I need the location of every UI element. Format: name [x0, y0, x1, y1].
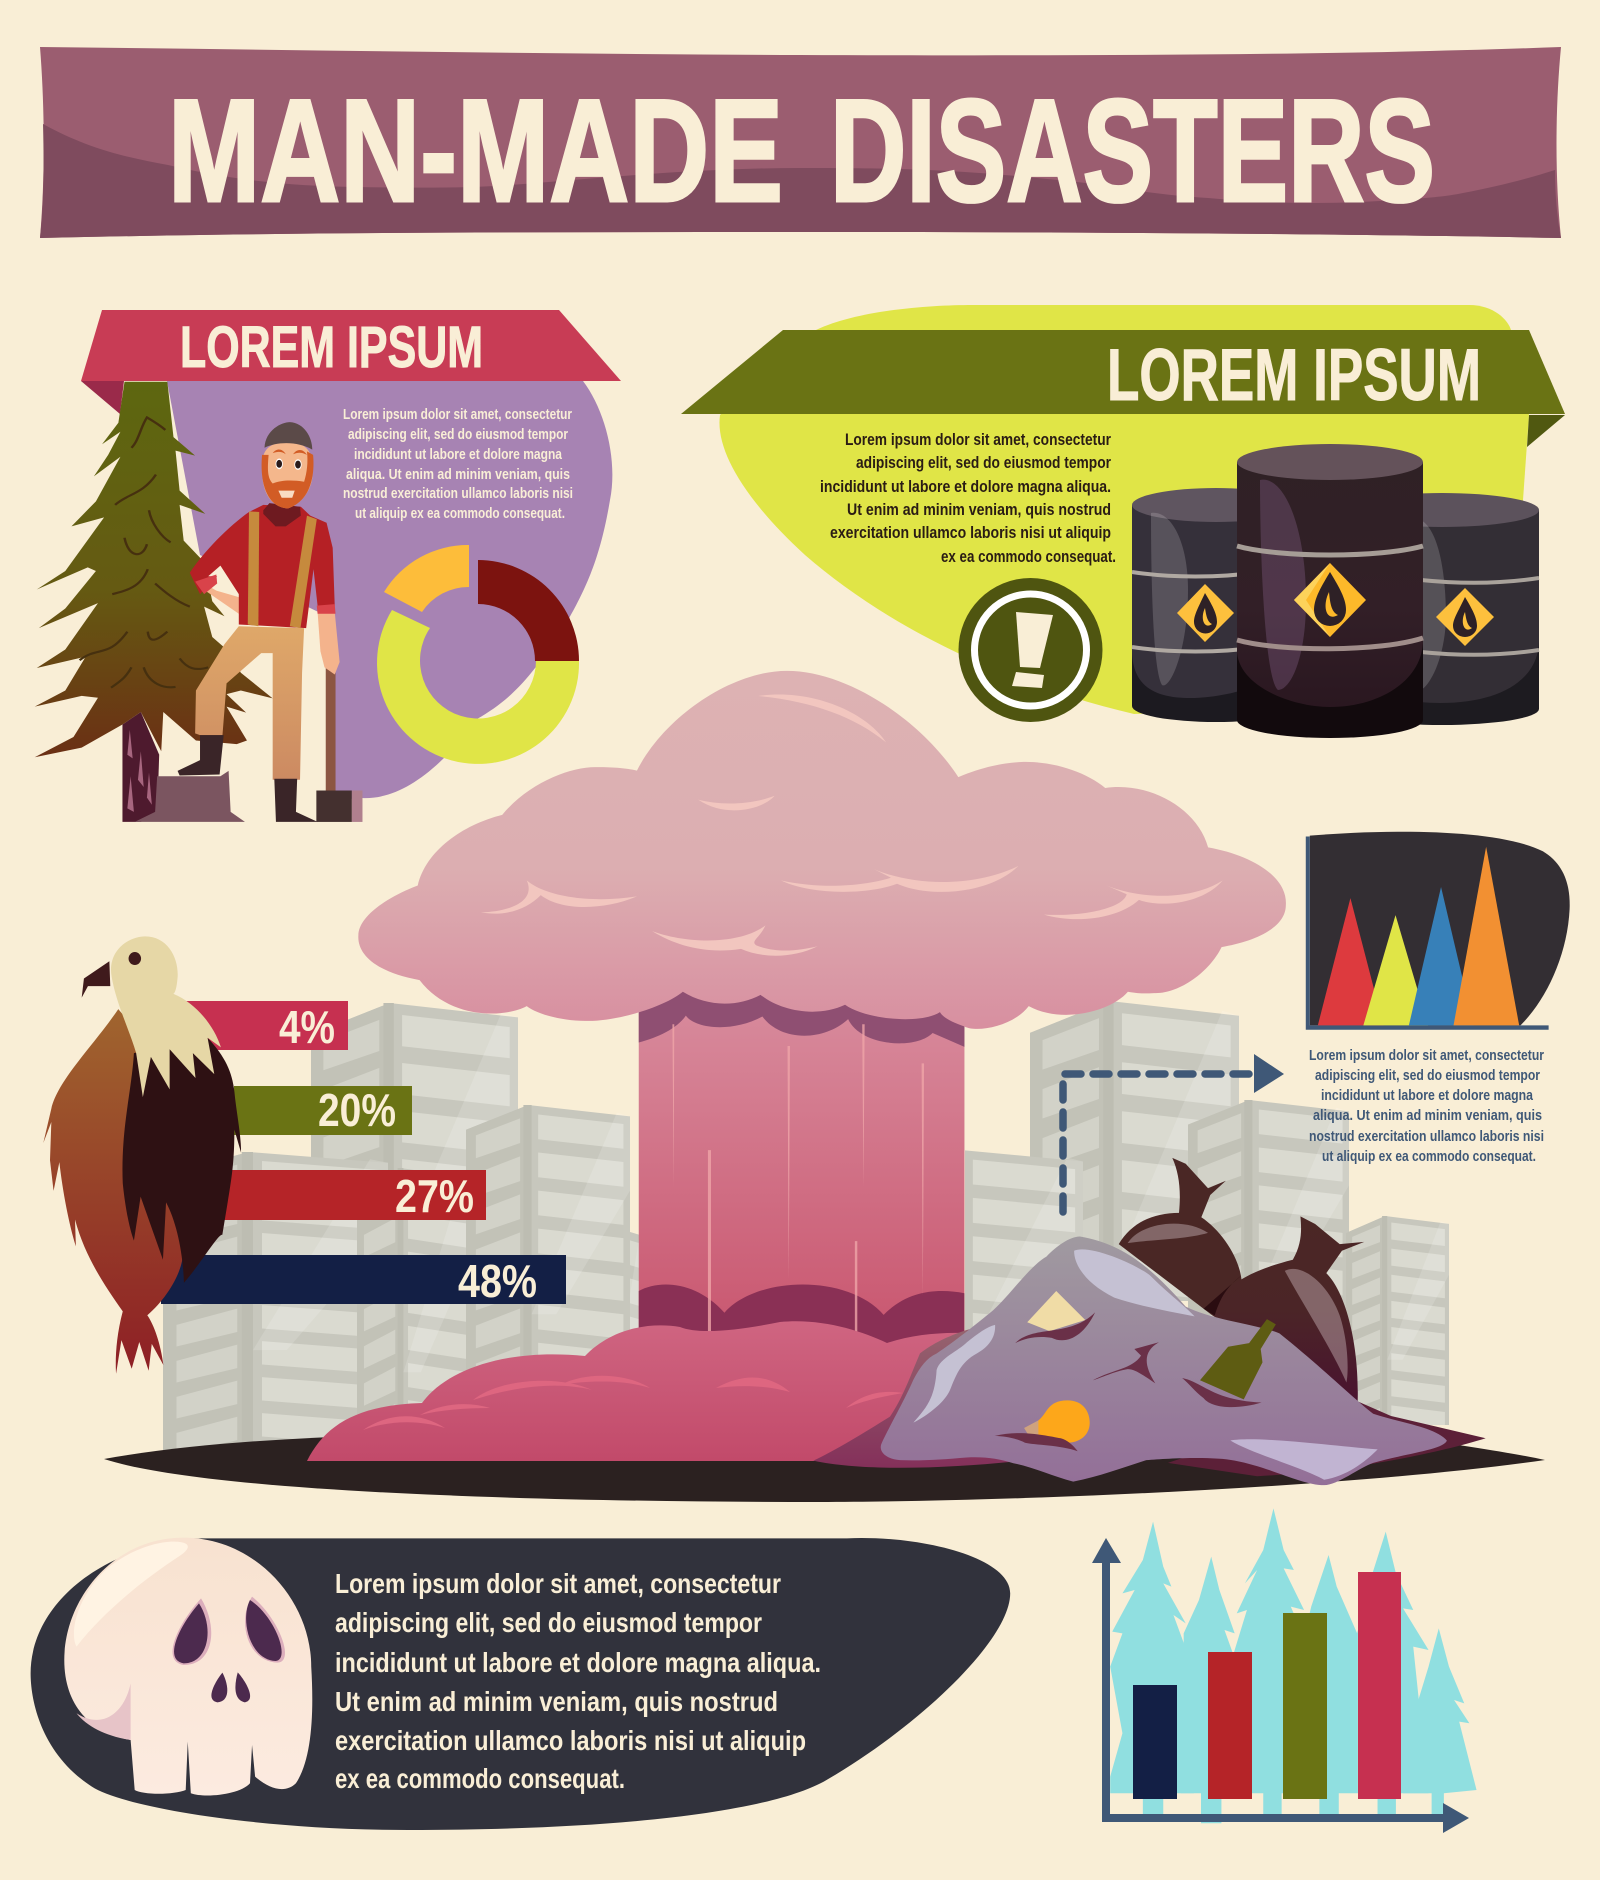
- purple blob: [167, 381, 612, 800]
- body text: adipiscing elit, sed do eiusmod tempor: [856, 453, 1111, 472]
- forest silhouette: [1110, 1508, 1477, 1823]
- donut chart: [377, 545, 579, 764]
- body text: Lorem ipsum dolor sit amet, consectetur: [343, 407, 572, 423]
- red banner: [81, 310, 621, 414]
- body text: ut aliquip ex ea commodo consequat.: [355, 506, 565, 522]
- body text: Lorem ipsum dolor sit amet, consectetur: [335, 1568, 781, 1599]
- title banner: [40, 47, 1561, 238]
- mushroom cloud: [307, 671, 1286, 1461]
- bar 27%: 27%: [395, 1170, 474, 1222]
- light bulb: [1024, 1400, 1090, 1443]
- panel: skull text: [31, 1538, 1010, 1830]
- icon: skull: [64, 1538, 312, 1796]
- boots: [178, 735, 224, 776]
- pants: [195, 626, 304, 780]
- head: [262, 422, 314, 508]
- ground shadow: [104, 1424, 1545, 1502]
- pink ground cloud: [307, 1321, 1010, 1461]
- bar 20%: 20%: [318, 1084, 396, 1136]
- bar 48%: 48%: [458, 1255, 537, 1307]
- center barrel: [1237, 444, 1423, 738]
- trash heap: [881, 1236, 1447, 1485]
- chart caption: Lorem ipsum dolor sit amet, consectetur: [1309, 1048, 1544, 1064]
- building group left: [163, 1003, 645, 1606]
- body text: incididunt ut labore et dolore magna: [354, 447, 563, 463]
- garbage bags: [1119, 1158, 1364, 1405]
- body text: nostrud exercitation ullamco laboris nisi: [343, 486, 573, 502]
- bar 20%: [234, 1084, 412, 1136]
- green blob: [719, 305, 1529, 714]
- olive banner: [681, 330, 1565, 447]
- panel: triangle chart: [1306, 832, 1570, 1030]
- panel: forest bar chart: [1092, 1508, 1477, 1833]
- body text: adipiscing elit, sed do eiusmod tempor: [348, 427, 568, 443]
- rips in trash bag: [995, 1312, 1262, 1451]
- body text: incididunt ut labore et dolore magna aliqua.: [820, 477, 1111, 496]
- body text: Ut enim ad minim veniam, quis nostrud: [847, 500, 1111, 519]
- dark fold under trash: [813, 1327, 1013, 1468]
- bars: [1133, 1572, 1401, 1799]
- suspenders: [248, 511, 259, 626]
- dark blob: [1310, 832, 1570, 1025]
- bar 48%: [161, 1255, 566, 1307]
- left barrel: [1132, 488, 1300, 722]
- triangle bars: [1318, 847, 1519, 1025]
- icon: warning exclamation: [958, 578, 1102, 722]
- arrow: dashed connector: [1063, 1054, 1284, 1212]
- lumberjack figure: [135, 422, 362, 822]
- arms skin: [200, 583, 247, 614]
- trash pile: [813, 1158, 1486, 1485]
- body text: Lorem ipsum dolor sit amet, consectetur: [845, 430, 1111, 449]
- body text: exercitation ullamco laboris nisi ut aliquip: [335, 1725, 806, 1756]
- panel: lumberjack: [35, 310, 621, 822]
- building group right: [886, 1001, 1449, 1533]
- right barrel: [1345, 493, 1539, 725]
- bar 4%: [185, 1001, 348, 1053]
- pine tree: [35, 382, 273, 822]
- body text: adipiscing elit, sed do eiusmod tempor: [335, 1607, 762, 1638]
- body text: exercitation ullamco laboris nisi ut aliquip: [830, 523, 1111, 542]
- dark blob: [31, 1538, 1010, 1830]
- chart caption: adipiscing elit, sed do eiusmod tempor: [1315, 1068, 1540, 1084]
- body text: ex ea commodo consequat.: [941, 547, 1116, 566]
- axe: [316, 644, 362, 822]
- bar 27%: [214, 1170, 486, 1222]
- body text: [335, 1568, 821, 1794]
- title text: MAN-MADE: [168, 69, 783, 232]
- body text: Ut enim ad minim veniam, quis nostrud: [335, 1686, 778, 1717]
- chart axes: [1092, 1538, 1469, 1833]
- bar 4%: 4%: [279, 1001, 335, 1053]
- cloud cap: [358, 671, 1286, 1029]
- chart axes: [1306, 837, 1549, 1030]
- body text: [820, 430, 1116, 566]
- stump: [135, 771, 245, 822]
- paper scrap: [1027, 1291, 1085, 1331]
- cloud stem: [639, 964, 964, 1371]
- chart caption: ut aliquip ex ea commodo consequat.: [1322, 1149, 1536, 1165]
- body text: [343, 407, 573, 522]
- chart caption: incididunt ut labore et dolore magna: [1321, 1088, 1534, 1104]
- city buildings: [163, 1001, 1449, 1606]
- shirt: [190, 505, 335, 628]
- vulture: [43, 936, 241, 1374]
- red banner: LOREM IPSUM: [180, 315, 483, 380]
- chart caption: nostrud exercitation ullamco laboris nisi: [1309, 1129, 1544, 1145]
- body text: aliqua. Ut enim ad minim veniam, quis: [346, 467, 570, 483]
- percentage bars: [161, 1001, 566, 1307]
- green bottle: [1200, 1319, 1276, 1399]
- body text: ex ea commodo consequat.: [335, 1763, 625, 1794]
- body text: incididunt ut labore et dolore magna aliqua.: [335, 1647, 821, 1678]
- chart caption: aliqua. Ut enim ad minim veniam, quis: [1313, 1108, 1542, 1124]
- panel: oil barrels: [681, 305, 1565, 738]
- chart caption: [1309, 1048, 1544, 1165]
- collar: [263, 503, 301, 526]
